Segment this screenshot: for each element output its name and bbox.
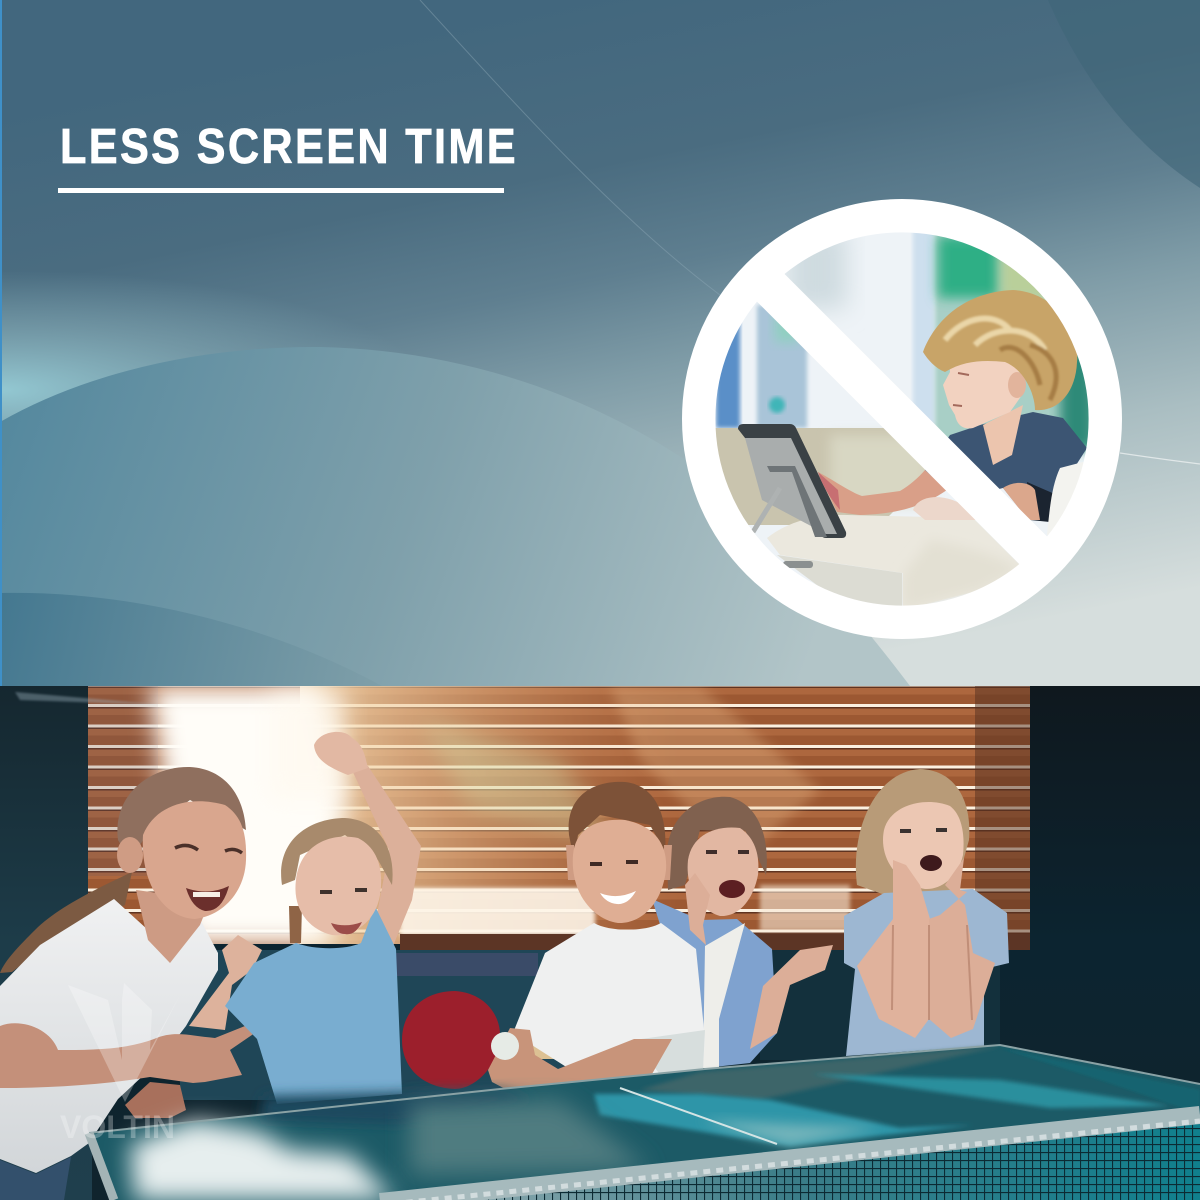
smile	[331, 922, 362, 934]
heading: LESS SCREEN TIME	[60, 120, 518, 174]
left arm	[189, 935, 262, 1030]
left arm and hand	[857, 860, 930, 1038]
shirt	[225, 906, 402, 1104]
panel: gradient background	[0, 0, 1200, 686]
prohibition sign	[699, 216, 1105, 622]
sofa	[712, 428, 925, 525]
kid 1 left	[0, 767, 270, 1200]
hair back	[856, 769, 969, 895]
fist	[314, 732, 368, 775]
window blinds	[88, 686, 1030, 945]
face	[573, 820, 666, 923]
side table	[777, 555, 902, 610]
hair	[117, 767, 246, 844]
dark wall	[0, 686, 1200, 1200]
room background	[712, 229, 1092, 609]
hair	[923, 290, 1077, 410]
arm and open hand	[750, 945, 833, 1049]
ear	[117, 837, 143, 873]
net	[380, 1115, 1200, 1200]
neck	[983, 405, 1023, 465]
eyes	[706, 850, 749, 854]
bench panel	[396, 953, 538, 976]
kid 5 right	[844, 769, 1009, 1056]
shirt	[844, 889, 1009, 1056]
undershirt	[703, 923, 745, 1068]
boy shirt	[925, 412, 1087, 522]
face	[688, 827, 758, 916]
shirt	[0, 899, 218, 1173]
hair	[667, 797, 767, 890]
face	[943, 361, 1021, 428]
face	[883, 802, 964, 889]
shirt	[513, 923, 705, 1076]
eyes and brows	[175, 845, 242, 853]
hands and forearm	[818, 470, 947, 515]
armrest	[1048, 464, 1077, 522]
hair	[569, 782, 665, 860]
eyes	[590, 862, 638, 864]
ears	[566, 845, 672, 880]
kid 4 behind	[652, 797, 833, 1068]
table tennis table	[89, 1045, 1200, 1200]
raised arm	[352, 766, 421, 946]
eyes	[900, 830, 947, 831]
photo: kids playing table tennis	[0, 686, 1200, 1200]
jacket	[652, 899, 777, 1068]
kid 3 boy	[488, 782, 705, 1093]
hair curls	[945, 319, 1056, 400]
table glare	[130, 1120, 395, 1200]
eyes	[320, 890, 367, 892]
tablet	[738, 424, 846, 538]
right arm and hand	[929, 858, 995, 1038]
braid	[289, 906, 302, 943]
neck	[136, 890, 210, 963]
hair	[281, 818, 393, 885]
facial details	[953, 373, 969, 406]
watermark: VOLTIN	[60, 1109, 175, 1145]
pointing arm	[0, 1023, 252, 1088]
face	[143, 801, 246, 919]
ponytail	[0, 872, 132, 973]
hand on cheek	[685, 873, 710, 945]
open mouth	[920, 855, 942, 871]
icon: crossed-out screen time photo	[699, 216, 1105, 622]
forearm and hand	[488, 1028, 672, 1093]
jeans	[0, 1157, 71, 1200]
ear	[1008, 372, 1026, 398]
second hand	[125, 1082, 186, 1118]
face	[295, 837, 381, 935]
smile	[600, 891, 636, 904]
lens flare	[15, 692, 165, 705]
watermark	[60, 983, 180, 1145]
heading underline	[58, 188, 504, 193]
smile	[186, 886, 229, 911]
arm creases	[892, 925, 972, 1020]
kid 2 raised arm	[189, 732, 421, 1104]
open mouth	[719, 880, 745, 898]
paddle	[402, 991, 555, 1089]
ball	[491, 1032, 519, 1060]
window sill	[400, 934, 1030, 950]
